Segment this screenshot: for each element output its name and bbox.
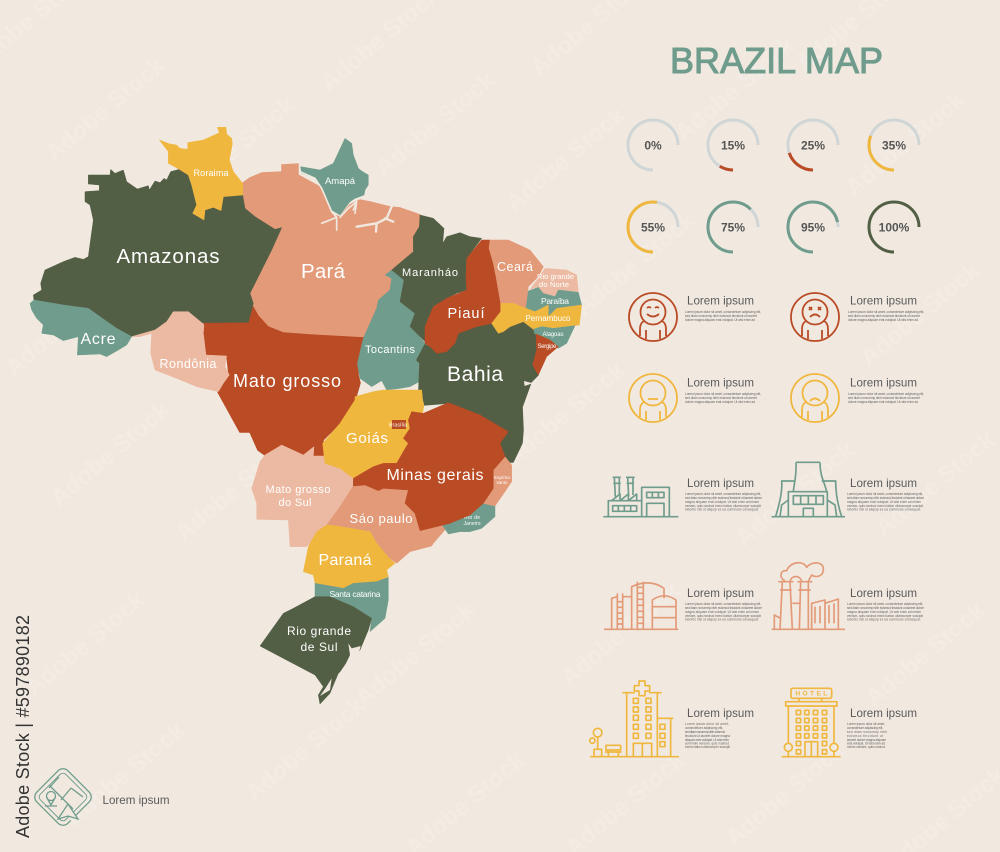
region: Mato Grosso: Mato grosso xyxy=(233,371,341,391)
region: Alagoas: Alagoas xyxy=(542,332,564,338)
ring 100% xyxy=(869,202,919,252)
text block: person 4 xyxy=(848,376,924,404)
ring 15% xyxy=(708,120,758,170)
region: Goiás: Goiás xyxy=(346,430,388,447)
region: Tocantins: Tocantins xyxy=(365,344,416,356)
region: Amapá xyxy=(301,138,368,215)
region: Paraná xyxy=(303,525,395,588)
ring 25%: 25% xyxy=(801,138,825,152)
text block: smoking chimneys: Lorem ipsum xyxy=(850,587,917,600)
region: Bahia xyxy=(417,322,538,462)
watermark pattern: Adobe Stock xyxy=(720,736,851,852)
ring 35%: 35% xyxy=(882,138,906,152)
text block: person 3: sed diam nonummy nibh euismod tincidunt ut laoreet xyxy=(685,396,757,400)
watermark pattern: Adobe Stock xyxy=(190,226,321,342)
watermark pattern: Adobe Stock xyxy=(0,266,131,382)
text block: storage tanks: Lorem ipsum xyxy=(687,587,754,600)
text block: hospital xyxy=(685,707,754,749)
icon: power plant xyxy=(772,462,845,517)
text block: hospital: ad minim veniam, quis nostrud xyxy=(685,742,729,746)
region: Paraná: Paraná xyxy=(318,552,372,569)
text block: smoking chimneys xyxy=(847,587,924,622)
text block: person 3 xyxy=(685,376,761,404)
region: Rondônia: Rondônia xyxy=(160,357,217,371)
region: Pará xyxy=(243,164,420,338)
text block: storage tanks: Lorem ipsum dolor sit amet, consectetuer adipiscing elit, xyxy=(685,602,761,606)
text block: power plant: sed diam nonummy nibh euismod tincidunt ut laoreet dolore xyxy=(847,496,924,500)
icon: happy person xyxy=(629,293,677,341)
legend label: Lorem ipsum xyxy=(102,794,170,807)
text block: factory xyxy=(685,477,762,512)
text block: hotel: sed diam nonummy nibh xyxy=(847,730,887,734)
watermark pattern: Adobe Stock xyxy=(20,586,151,702)
text block: smoking chimneys: sed diam nonummy nibh euismod tincidunt ut laoreet dolore xyxy=(847,606,924,610)
ring 75% xyxy=(708,202,758,252)
text block: storage tanks: sed diam nonummy nibh euismod tincidunt ut laoreet dolore xyxy=(685,606,762,610)
watermark pattern: Adobe Stock xyxy=(570,206,701,322)
region: Espírito Santo xyxy=(483,457,512,506)
stock id vertical text: Adobe Stock | #597890182 xyxy=(13,615,33,838)
text block: hotel: laoreet dolore magna aliquam xyxy=(847,738,886,742)
region: Mato Grosso xyxy=(203,305,363,456)
watermark pattern: Adobe Stock xyxy=(370,66,501,182)
watermark pattern: Adobe Stock xyxy=(840,86,971,202)
text block: hospital: sed diam nonummy nibh euismod xyxy=(685,730,725,734)
region: Rio Grande do Sul xyxy=(260,597,372,704)
text block: hotel: erat volutpat. Ut wisi enim ad xyxy=(847,742,885,746)
region: Paraíba: Paraíba xyxy=(541,296,569,306)
text block: smoking chimneys: Lorem ipsum dolor sit amet, consectetuer adipiscing elit, xyxy=(847,602,923,606)
text block: storage tanks xyxy=(685,587,762,622)
text block: hospital: Lorem ipsum dolor sit amet, xyxy=(685,722,729,726)
watermark pattern: Adobe Stock xyxy=(500,101,631,217)
text block: person 3: Lorem ipsum xyxy=(687,376,754,390)
text block: person 1: dolore magna aliquam erat volutpat. Ut wisi enim ad xyxy=(685,318,755,322)
text block: power plant: lobortis nisl ut aliquip ex ea commodo consequat. xyxy=(847,508,921,512)
text block: power plant xyxy=(847,477,924,512)
region: Sergipe: Sergipe xyxy=(538,344,557,350)
Amazon river delta xyxy=(300,172,393,232)
region: Paraíba xyxy=(526,287,582,317)
region: Roraima xyxy=(159,127,243,220)
ring 100%: 100% xyxy=(879,220,910,234)
ring 15%: 15% xyxy=(721,138,745,152)
watermark pattern: Adobe Stock xyxy=(40,51,171,167)
region: Alagoas xyxy=(533,326,575,348)
text block: factory: magna aliquam erat volutpat. Ut wisi enim ad minim xyxy=(685,500,759,504)
region: Espírito Santo: santo xyxy=(496,480,508,485)
watermark pattern: Adobe Stock xyxy=(730,436,861,552)
region: Rio de Janeiro: Janeiro xyxy=(464,521,481,527)
region: Pernambuco: Pernambuco xyxy=(526,314,571,323)
region: Ceará xyxy=(489,240,543,308)
region: São Paulo: Sáo paulo xyxy=(350,511,412,526)
text block: power plant: Lorem ipsum dolor sit amet, consectetuer adipiscing elit, xyxy=(847,492,923,496)
region: Maranhão: Maranháo xyxy=(402,267,458,279)
text block: person 4: sed diam nonummy nibh euismod tincidunt ut laoreet xyxy=(848,396,920,400)
text block: person 2: Lorem ipsum xyxy=(850,294,917,308)
ring 55% xyxy=(628,202,678,252)
region: Mato Grosso do Sul xyxy=(252,445,353,547)
text block: person 1 xyxy=(685,294,761,322)
watermark pattern: Adobe Stock xyxy=(870,426,1000,542)
icon: unhappy person xyxy=(791,374,839,422)
region: Minas Gerais: Minas gerais xyxy=(386,467,484,484)
text block: hotel: Lorem ipsum dolor sit amet, xyxy=(847,722,885,726)
text block: person 1: sed diam nonummy nibh euismod tincidunt ut laoreet xyxy=(685,314,757,318)
region: Acre xyxy=(30,300,132,357)
text block: hospital: Lorem ipsum xyxy=(687,707,754,720)
watermark pattern: Adobe Stock xyxy=(350,596,481,712)
text block: hotel: consectetuer adipiscing elit, xyxy=(847,726,883,730)
region: Minas Gerais xyxy=(353,403,508,531)
icon: neutral person xyxy=(629,374,677,422)
ring 95%: 95% xyxy=(801,220,825,234)
region: Roraima: Roraima xyxy=(194,168,228,178)
region: Sergipe xyxy=(533,334,558,375)
region: Santa Catarina: Santa catarina xyxy=(330,589,381,599)
region: Piauí: Piauí xyxy=(448,306,484,322)
region: Santa Catarina xyxy=(315,577,388,632)
watermark pattern: Adobe Stock xyxy=(555,576,686,692)
text block: hospital: aliquam erat volutpat. Ut wisi enim xyxy=(685,738,729,742)
text block: storage tanks: veniam, quis nostrud exerci tation ullamcorper suscipit xyxy=(685,614,761,618)
region: Rondônia xyxy=(132,312,229,392)
watermark pattern: Adobe Stock xyxy=(670,31,801,147)
progress rings xyxy=(628,120,919,252)
watermark pattern: Adobe Stock xyxy=(240,691,371,807)
text block: person 1: Lorem ipsum xyxy=(687,294,754,308)
watermark pattern: Adobe Stock xyxy=(45,396,176,512)
region: Mato Grosso do Sul: Mato grosso xyxy=(266,484,330,496)
region: Pernambuco xyxy=(492,303,582,333)
text block: storage tanks: magna aliquam erat volutpat. Ut wisi enim ad minim xyxy=(685,610,759,614)
region: Rio Grande do Norte: Rio grande xyxy=(537,272,574,281)
text block: hospital: consectetuer adipiscing elit, xyxy=(685,726,723,730)
ring 55%: 55% xyxy=(641,220,665,234)
text block: hospital: tincidunt ut laoreet dolore magna xyxy=(685,734,730,738)
region: Bahia: Bahia xyxy=(447,363,503,386)
text block: smoking chimneys: magna aliquam erat volutpat. Ut wisi enim ad minim xyxy=(847,610,921,614)
text block: hotel: minim veniam, quis nostrud xyxy=(847,745,885,749)
region: Brasília xyxy=(389,420,407,429)
text block: hotel: Lorem ipsum xyxy=(850,707,917,720)
region: Rio de Janeiro xyxy=(442,500,495,534)
text block: hotel: euismod tincidunt ut xyxy=(847,734,883,738)
ring 25% xyxy=(788,120,838,170)
text block: storage tanks: lobortis nisl ut aliquip ex ea commodo consequat. xyxy=(685,618,759,622)
watermark pattern: Adobe Stock xyxy=(60,716,191,832)
icon: hotel: HOTEL xyxy=(795,691,827,698)
watermark pattern: Adobe Stock xyxy=(500,356,631,472)
text block: hotel xyxy=(847,707,917,749)
icon: hotel xyxy=(782,688,841,757)
text block: person 4: Lorem ipsum xyxy=(850,376,917,390)
region: Rio Grande do Norte: do Norte xyxy=(539,280,569,289)
icon: smoking chimneys xyxy=(772,563,845,629)
text block: person 2: Lorem ipsum dolor sit amet, consectetuer adipiscing elit, xyxy=(848,310,924,314)
icon: map pin diamond xyxy=(32,766,94,828)
text block: person 4: Lorem ipsum dolor sit amet, consectetuer adipiscing elit, xyxy=(848,392,924,396)
watermark pattern: Adobe Stock xyxy=(855,256,986,372)
text block: person 3: dolore magna aliquam erat volutpat. Ut wisi enim ad xyxy=(685,400,755,404)
region: Maranhão xyxy=(392,215,482,343)
text block: hospital: exerci tation ullamcorper suscipit xyxy=(685,745,730,749)
text block: factory: Lorem ipsum xyxy=(687,477,754,490)
watermark pattern: Adobe Stock xyxy=(170,431,301,547)
region: Espírito Santo: Espírito xyxy=(494,475,510,480)
ring 95% xyxy=(788,202,838,252)
region: Ceará: Ceará xyxy=(497,260,533,274)
region: São Paulo xyxy=(327,485,448,563)
ring 75%: 75% xyxy=(721,220,745,234)
text block: factory: veniam, quis nostrud exerci tation ullamcorper suscipit xyxy=(685,504,761,508)
region: Goiás xyxy=(323,390,424,478)
icon: sad person xyxy=(791,293,839,341)
text block: power plant: Lorem ipsum xyxy=(850,477,917,490)
region: Rio Grande do Norte xyxy=(530,268,578,297)
text block: power plant: veniam, quis nostrud exerci tation ullamcorper suscipit xyxy=(847,504,923,508)
text block: smoking chimneys: veniam, quis nostrud exerci tation ullamcorper suscipit xyxy=(847,614,923,618)
region: Acre: Acre xyxy=(80,331,116,348)
text block: person 2 xyxy=(848,294,924,322)
text block: person 2: sed diam nonummy nibh euismod tincidunt ut laoreet xyxy=(848,314,920,318)
text block: factory: lobortis nisl ut aliquip ex ea commodo consequat. xyxy=(685,508,759,512)
text block: person 1: Lorem ipsum dolor sit amet, consectetuer adipiscing elit, xyxy=(685,310,761,314)
region: Brasília: Brasília xyxy=(389,422,407,428)
text block: factory: sed diam nonummy nibh euismod tincidunt ut laoreet dolore xyxy=(685,496,762,500)
region: Rio de Janeiro: Rio de xyxy=(464,515,480,521)
region: Piauí xyxy=(425,240,501,353)
title: BRAZIL MAP xyxy=(670,40,883,81)
text block: person 4: dolore magna aliquam erat volutpat. Ut wisi enim ad xyxy=(848,400,918,404)
ring 0% xyxy=(628,120,678,170)
icon: storage tanks xyxy=(604,582,678,629)
map of Brazil xyxy=(30,127,582,704)
icon: factory xyxy=(603,477,678,517)
text block: factory: Lorem ipsum dolor sit amet, consectetuer adipiscing elit, xyxy=(685,492,761,496)
text block: person 3: Lorem ipsum dolor sit amet, consectetuer adipiscing elit, xyxy=(685,392,761,396)
text block: person 2: dolore magna aliquam erat volutpat. Ut wisi enim ad xyxy=(848,318,918,322)
region: Amazonas: Amazonas xyxy=(116,245,220,268)
region: Rio Grande do Sul: de Sul xyxy=(300,640,338,654)
region: Tocantins xyxy=(357,270,427,390)
text block: smoking chimneys: lobortis nisl ut aliquip ex ea commodo consequat. xyxy=(847,618,921,622)
region: Rio Grande do Sul: Rio grande xyxy=(287,624,351,638)
ring 35% xyxy=(869,120,919,170)
icon: hospital xyxy=(590,681,679,757)
region: Amazonas xyxy=(33,169,282,337)
watermark pattern: Adobe Stock xyxy=(860,596,991,712)
region: Mato Grosso do Sul: do Sul xyxy=(278,497,312,509)
text block: power plant: magna aliquam erat volutpat. Ut wisi enim ad minim xyxy=(847,500,921,504)
region: Pará: Pará xyxy=(301,260,346,283)
region: Amapá: Amapá xyxy=(325,176,356,187)
ring 0%: 0% xyxy=(644,138,662,152)
watermark pattern: Adobe Stock xyxy=(170,91,301,207)
